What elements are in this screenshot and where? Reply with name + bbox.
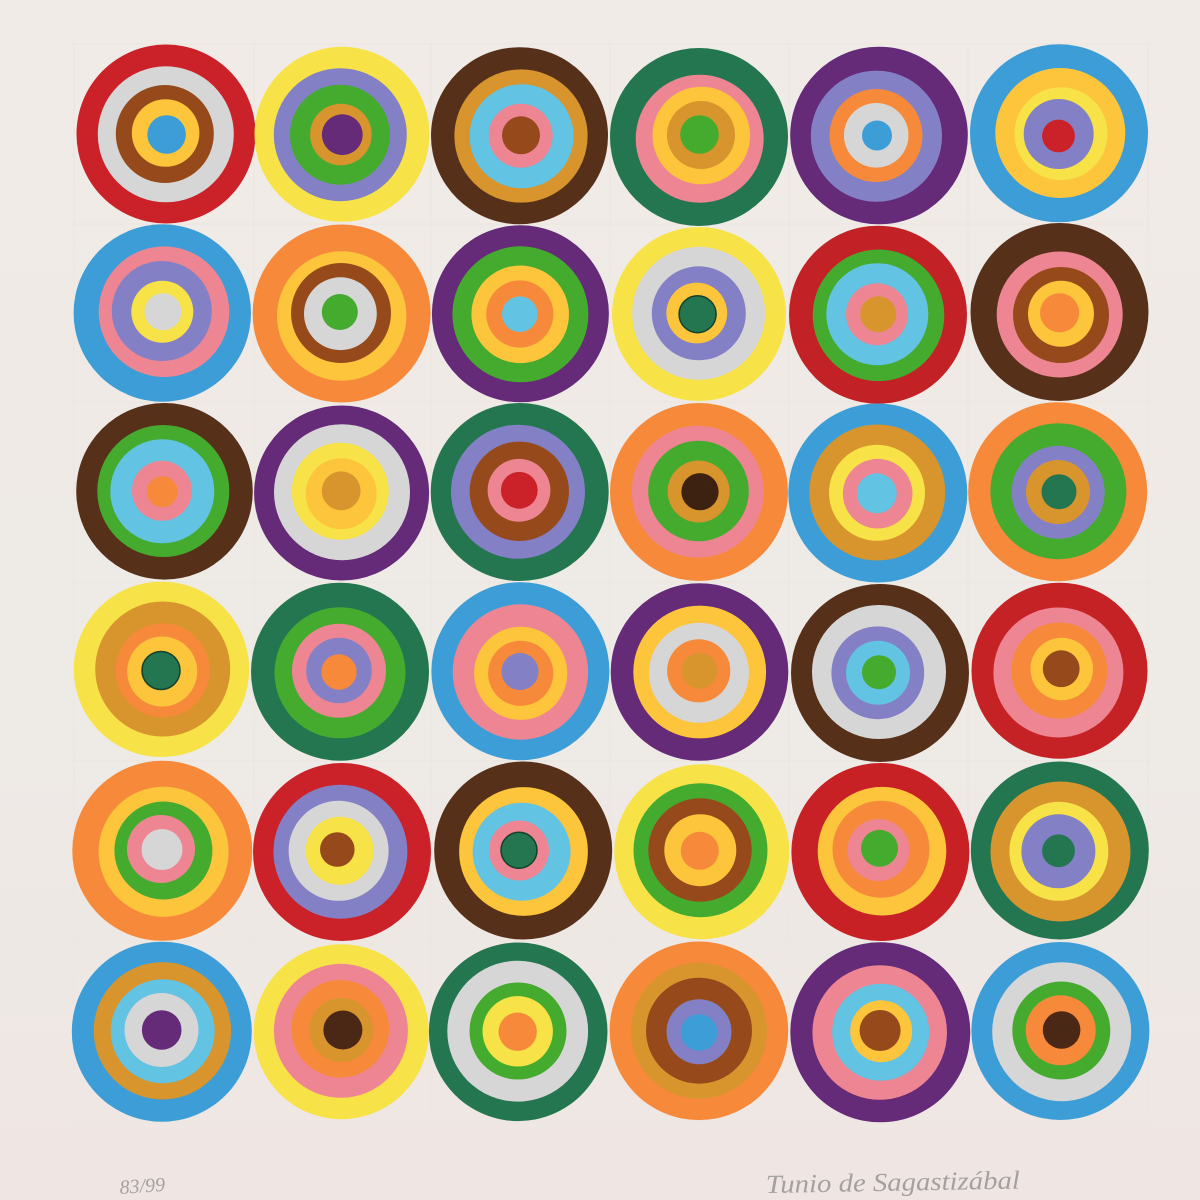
circle row 1 column 6: blue, gold, yellow, periwinkle, red: [970, 44, 1148, 222]
circle row 1 column 2: yellow, periwinkle, green, tan, purple: [254, 47, 430, 222]
circle row 2 column 5: red, green, cyan, pink, tan: [789, 226, 967, 404]
circle row 1 column 1: red, silver, brown, gold, blue: [76, 44, 256, 224]
circle row 6 column 5: purple, pink, cyan, gold, brown: [790, 942, 970, 1122]
circle row 5 column 1: orange, gold, green, pink, silver: [72, 761, 252, 941]
circle row 3 column 3: dark green, periwinkle, brown, pink, red: [431, 403, 609, 581]
circle row 4 column 3: blue, pink, gold, orange, periwinkle: [431, 582, 609, 760]
circle row 3 column 5: blue, tan, yellow, pink, cyan: [788, 404, 967, 582]
circle row 6 column 4: orange, tan, brown, periwinkle, blue: [610, 942, 788, 1120]
circle row 4 column 2: dark green, green, pink, periwinkle, orange: [251, 583, 429, 761]
circle row 4 column 6: red, pink, orange, gold, brown: [972, 583, 1148, 759]
circle row 5 column 3: dark brown, gold, cyan, pink, dark green: [434, 762, 612, 940]
circle row 3 column 4: orange, pink, green, tan, dark brown: [610, 403, 788, 581]
circle row 5 column 6: dark green, tan, yellow, periwinkle, dark green: [971, 762, 1149, 940]
circle row 6 column 6: blue, silver, green, orange, dark brown: [971, 942, 1149, 1120]
circle row 5 column 2: red, periwinkle, silver, yellow, brown: [253, 763, 431, 941]
circle row 2 column 2: orange, gold, brown, silver, green: [253, 224, 431, 402]
circle row 3 column 2: purple, silver, yellow, gold, tan: [254, 406, 429, 580]
circle row 2 column 4: yellow, silver, periwinkle, gold, dark green: [612, 227, 786, 401]
circle row 1 column 5: purple, periwinkle, orange, silver, blue: [790, 47, 968, 224]
circle row 2 column 1: blue, pink, periwinkle, yellow, silver: [74, 224, 251, 402]
circle row 2 column 3: purple, green, gold, orange, cyan: [432, 225, 609, 402]
circle row 6 column 3: dark green, silver, green, yellow, orange: [429, 943, 608, 1121]
circle row 1 column 4: dark green, pink, gold, tan, green: [610, 48, 788, 226]
artist signature handwritten: Tunio de Sagastizábal: [766, 1166, 1020, 1199]
circle row 6 column 2: yellow, pink, orange, tan, dark brown: [254, 944, 429, 1119]
edition number handwritten: 83/99: [119, 1174, 166, 1199]
circle row 2 column 6: dark brown, pink, brown, gold, orange: [970, 223, 1148, 401]
circle row 4 column 5: dark brown, silver, periwinkle, cyan, green: [791, 584, 969, 762]
circle row 4 column 1: yellow, tan, orange, gold, dark green: [74, 582, 249, 757]
circle row 6 column 1: blue, tan, cyan, silver, purple: [72, 942, 252, 1122]
circle row 4 column 4: purple, gold, silver, orange, tan: [611, 583, 788, 761]
circle row 5 column 4: yellow, green, brown, gold, orange: [614, 764, 789, 939]
circle row 5 column 5: red, gold, orange, pink, green: [791, 763, 969, 941]
circle row 1 column 3: dark brown, tan, cyan, pink, brown: [431, 47, 608, 224]
circle row 3 column 1: dark brown, green, cyan, pink, orange: [76, 403, 253, 580]
circle row 3 column 6: orange, green, periwinkle, tan, dark green: [968, 402, 1147, 581]
